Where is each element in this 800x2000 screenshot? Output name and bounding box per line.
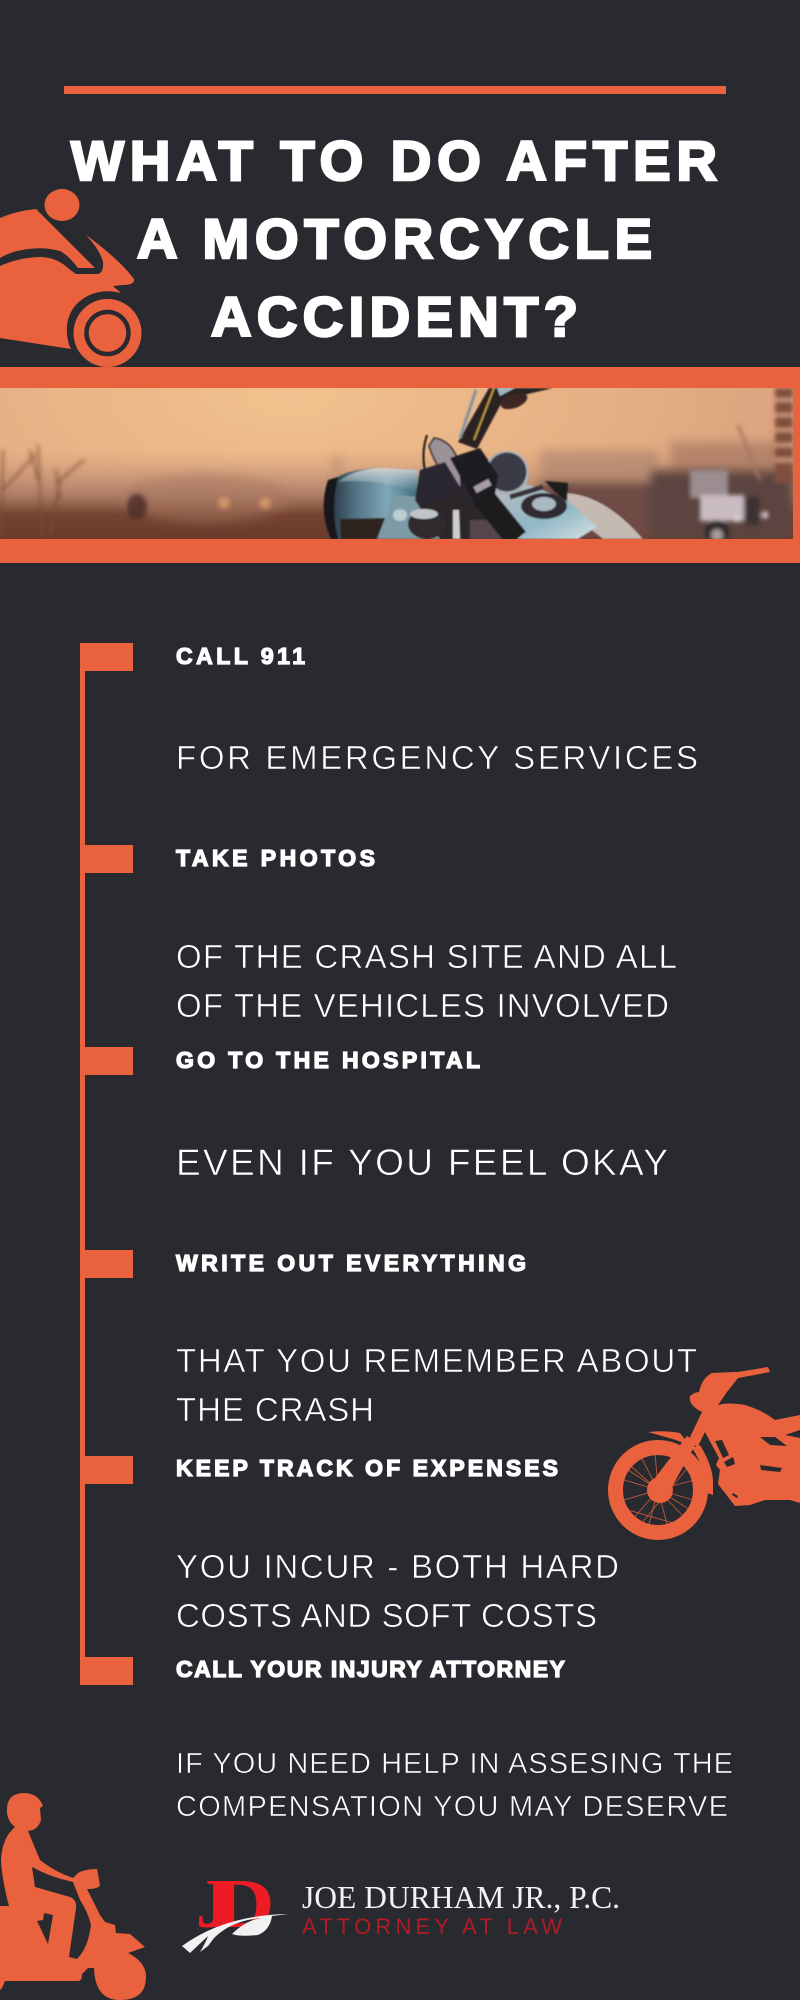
step 5: COSTS AND SOFT COSTS	[176, 1597, 597, 1634]
step 4: WRITE OUT EVERYTHING	[176, 1250, 526, 1276]
step 3: GO TO THE HOSPITAL	[176, 1047, 480, 1073]
step 4: THE CRASH	[176, 1391, 374, 1428]
title: WHAT TO DO AFTER	[71, 129, 717, 192]
clutch block	[450, 448, 498, 505]
grip	[483, 497, 517, 539]
step 5: YOU INCUR - BOTH HARD	[176, 1548, 619, 1585]
logo: Joe Durham Jr., P.C.: JOE DURHAM JR., P.C.	[302, 1879, 620, 1915]
title: ACCIDENT?	[211, 285, 578, 348]
step 6: IF YOU NEED HELP IN ASSESING THE	[176, 1748, 733, 1780]
icon: scooter rider	[0, 1793, 146, 2000]
orange photo band	[0, 367, 800, 563]
step 6: COMPENSATION YOU MAY DESERVE	[176, 1791, 728, 1823]
step 1	[176, 643, 698, 776]
headlight bowl	[325, 468, 420, 539]
step 5: KEEP TRACK OF EXPENSES	[176, 1455, 558, 1481]
step 2: TAKE PHOTOS	[176, 845, 375, 871]
photo: motorcycle handlebars at sunset	[0, 388, 793, 544]
lever	[429, 438, 461, 491]
mirror stem	[458, 388, 553, 449]
step 6: CALL YOUR INJURY ATTORNEY	[176, 1656, 565, 1682]
step 1: CALL 911	[176, 643, 305, 669]
step 4	[176, 1250, 697, 1428]
title: A MOTORCYCLE	[137, 207, 652, 270]
logo mark	[182, 1866, 288, 1953]
chrome knob	[407, 516, 439, 539]
step 6	[176, 1656, 733, 1823]
logo mark: D	[212, 1866, 275, 1943]
step 2: OF THE CRASH SITE AND ALL	[176, 938, 677, 975]
title	[71, 129, 717, 348]
logo: Joe Durham Jr., P.C.: ATTORNEY AT LAW	[302, 1914, 562, 1939]
step 3: EVEN IF YOU FEEL OKAY	[176, 1142, 668, 1183]
logo: Joe Durham Jr., P.C.	[182, 1866, 620, 1953]
fender	[560, 493, 643, 539]
step 4: THAT YOU REMEMBER ABOUT	[176, 1342, 697, 1379]
step 5	[176, 1455, 619, 1634]
logo mark: J	[196, 1866, 231, 1943]
cap	[521, 493, 567, 519]
step 2	[176, 845, 677, 1024]
top accent bar	[64, 86, 726, 94]
icon: motorcycle rider	[0, 189, 142, 367]
timeline	[80, 643, 133, 1685]
step 1: FOR EMERGENCY SERVICES	[176, 739, 698, 776]
icon: motorcycle silhouette	[616, 1367, 800, 1532]
gauge	[485, 451, 529, 495]
console	[494, 484, 597, 539]
step 3	[176, 1047, 668, 1183]
step 2: OF THE VEHICLES INVOLVED	[176, 987, 669, 1024]
